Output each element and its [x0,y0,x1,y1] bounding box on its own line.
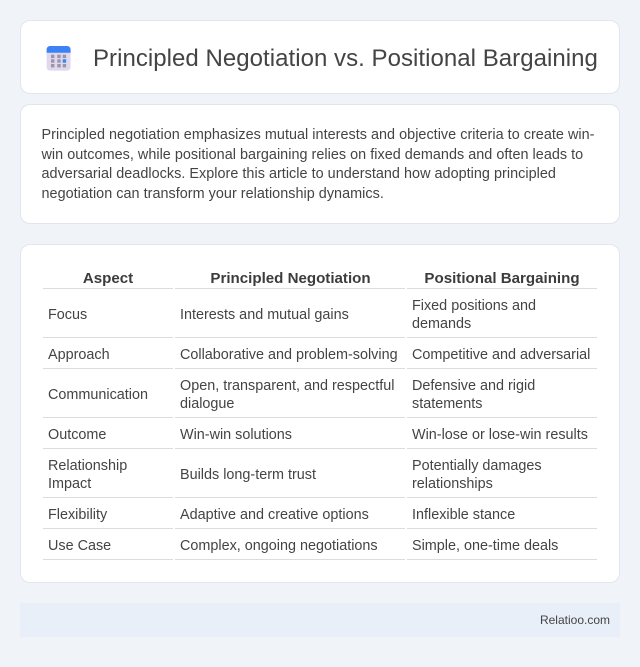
intro paragraph: negotiation can transform your relationship dynamics. [42,186,384,202]
row: Outcome: Outcome [48,427,106,443]
row: Approach [48,347,590,363]
row: Use Case: Simple, one-time deals [412,538,558,554]
row: Approach: Collaborative and problem-solving [180,347,398,363]
row: Use Case [48,538,558,554]
row: Outcome [48,427,588,443]
row: Focus: Fixed positions and [412,298,536,314]
table header row: Principled Negotiation [210,270,371,287]
intro paragraph: adversarial deadlocks. Explore this article to understand how adopting principled [42,166,556,182]
icon: calendar [46,46,71,71]
row: Focus: Focus [48,307,87,323]
row: Outcome: Win-win solutions [180,427,292,443]
row: Communication [48,378,535,412]
row: Relationship Impact: Potentially damages [412,458,542,474]
row: Communication: Communication [48,387,148,403]
footer bar [20,603,620,637]
row: Approach: Approach [48,347,110,363]
row: Relationship Impact: relationships [412,476,493,492]
row: Approach: Competitive and adversarial [412,347,590,363]
row: Communication: Defensive and rigid [412,378,535,394]
row: Flexibility: Inflexible stance [412,507,515,523]
table header row: Aspect [83,270,133,287]
row: Outcome: Win-lose or lose-win results [412,427,588,443]
row: Communication: statements [412,396,482,412]
title: Principled Negotiation vs. Positional Bargaining [93,45,598,72]
row: Flexibility: Adaptive and creative options [180,507,369,523]
table header row: Positional Bargaining [424,270,580,287]
row: Focus [48,298,536,332]
intro paragraph: Principled negotiation emphasizes mutual interests and objective criteria to create win- [42,127,594,143]
row: Focus: demands [412,316,471,332]
row: Flexibility: Flexibility [48,507,107,523]
intro paragraph [42,127,594,202]
row: Focus: Interests and mutual gains [180,307,349,323]
row: Relationship Impact: Relationship [48,458,127,474]
row: Relationship Impact: Impact [48,476,91,492]
row: Communication: Open, transparent, and respectful [180,378,394,394]
row: Flexibility [48,507,515,523]
row: Relationship Impact [48,458,542,492]
row: Use Case: Use Case [48,538,111,554]
row: Relationship Impact: Builds long-term trust [180,467,316,483]
row: Communication: dialogue [180,396,234,412]
footer credit: Relatioo.com [540,613,610,627]
intro text panel [20,104,620,224]
row: Use Case: Complex, ongoing negotiations [180,538,378,554]
intro paragraph: win outcomes, while positional bargaining relies on fixed demands and often leads to [42,146,583,162]
table header row [83,270,580,287]
header panel [20,20,620,94]
comparison table panel [20,244,620,583]
